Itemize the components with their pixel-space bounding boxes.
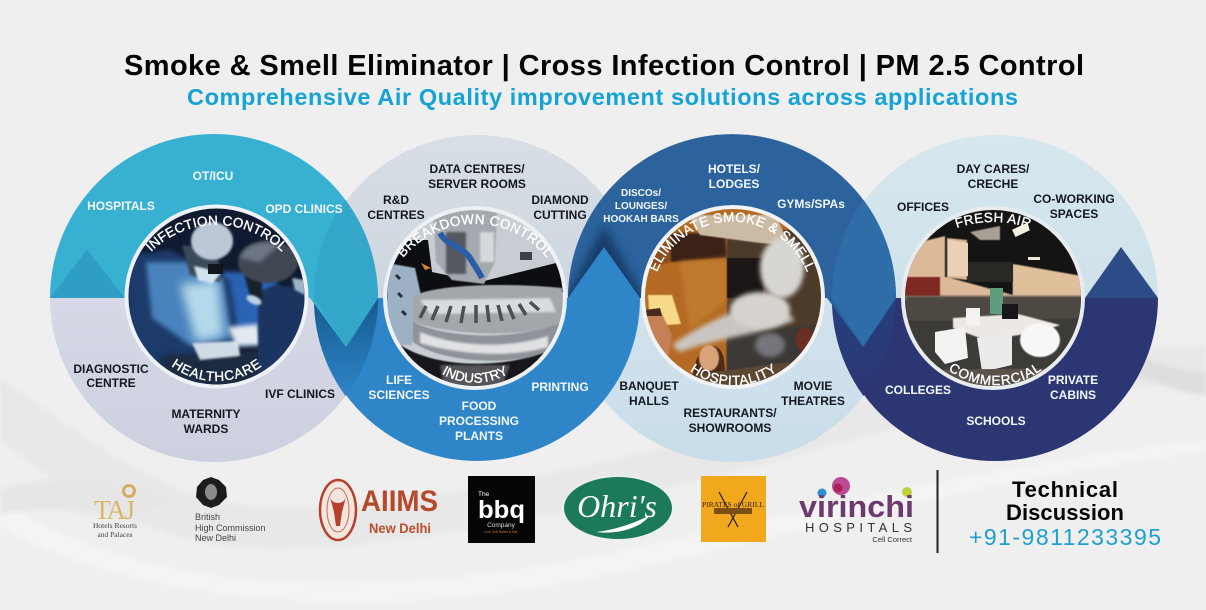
labels: industry applications: PROCESSING xyxy=(439,414,519,428)
curved label: healthcare: HEALTHCARE xyxy=(172,358,262,382)
labels: healthcare applications: IVF CLINICS xyxy=(265,387,335,401)
labels: industry applications: CENTRES xyxy=(367,208,425,222)
photo: industry xyxy=(383,206,567,390)
logo: Taj xyxy=(93,486,137,539)
labels: industry applications: FOOD xyxy=(462,399,497,413)
labels: industry applications: R&D xyxy=(383,193,409,207)
logo: British High Commission: High Commission xyxy=(195,523,266,533)
curved label: commercial: COMMERCIAL xyxy=(950,364,1042,386)
circle 3 upper band xyxy=(568,134,896,347)
subtitle: Comprehensive Air Quality improvement solutions across applications xyxy=(187,84,1018,110)
labels: commercial applications: SPACES xyxy=(1050,207,1098,221)
circle 2 upper half xyxy=(314,135,640,298)
photo: commercial xyxy=(901,206,1085,390)
contact block: Technical xyxy=(1012,477,1118,502)
curved label: eliminate smoke and smell: ELIMINATE SMOKE & SMELL xyxy=(648,212,814,272)
labels: commercial applications: OFFICES xyxy=(897,200,949,214)
contact block xyxy=(969,477,1161,550)
labels: industry applications: PRINTING xyxy=(531,380,589,394)
labels: healthcare applications: WARDS xyxy=(184,422,228,436)
labels: industry applications: CUTTING xyxy=(533,208,587,222)
logo: Pirates of Grill xyxy=(701,476,766,542)
logo: British High Commission: New Delhi xyxy=(195,533,236,543)
logo: Virinchi Hospitals: Cell Correct xyxy=(872,535,913,544)
title: Smoke & Smell Eliminator | Cross Infection Control | PM 2.5 Control xyxy=(124,50,1084,82)
photo: healthcare xyxy=(124,204,308,388)
circle 1 small triangle xyxy=(50,250,125,298)
circle 3 shadow beside peak xyxy=(568,225,642,298)
labels: commercial applications: CABINS xyxy=(1050,388,1096,402)
labels: commercial applications: DAY CARES/ xyxy=(957,162,1030,176)
circle 2 lower band xyxy=(314,247,640,461)
labels: industry applications: LIFE xyxy=(386,373,412,387)
logo: The bbq Company xyxy=(468,476,535,543)
labels: hospitality applications: SHOWROOMS xyxy=(689,421,771,435)
labels: hospitality applications: LOUNGES/ xyxy=(615,201,667,212)
labels: commercial applications: COLLEGES xyxy=(885,383,951,397)
logo: Ohri's xyxy=(563,476,673,540)
labels: hospitality applications: GYMs/SPAs xyxy=(777,197,845,211)
labels: commercial applications: SCHOOLS xyxy=(966,414,1026,428)
contact block: Discussion xyxy=(1006,500,1124,525)
circle 1 lower half xyxy=(50,298,378,462)
labels: commercial applications: PRIVATE xyxy=(1048,373,1098,387)
labels: healthcare applications: CENTRE xyxy=(86,376,136,390)
circle 4 peak xyxy=(1085,247,1158,298)
contact block: +91-9811233395 xyxy=(969,524,1161,550)
circle 3 lower half xyxy=(568,298,896,462)
labels: healthcare applications: OT/ICU xyxy=(193,169,233,183)
labels: industry applications: DATA CENTRES/ xyxy=(429,162,525,176)
divider xyxy=(936,470,938,553)
labels: hospitality applications: HOTELS/ xyxy=(708,162,761,176)
circle 1 upper band xyxy=(50,134,378,347)
labels: healthcare applications: OPD CLINICS xyxy=(265,202,343,216)
logo: The bbq Company: Live Grill Buffet & Bar xyxy=(484,530,519,534)
logo: British High Commission: British xyxy=(195,512,220,522)
panel: four linked circles xyxy=(50,134,1158,462)
logo: AIIMS New Delhi xyxy=(320,480,438,540)
labels: hospitality applications: HOOKAH BARS xyxy=(603,214,679,225)
circle 2 lens xyxy=(314,298,378,396)
logo: Taj: Hotels Resorts xyxy=(93,521,137,530)
labels: hospitality applications: THEATRES xyxy=(781,394,845,408)
curved label: industry: INDUSTRY xyxy=(442,365,506,383)
labels: industry applications: DIAMOND xyxy=(531,193,589,207)
labels: commercial applications: CRECHE xyxy=(968,177,1018,191)
labels: hospitality applications xyxy=(603,162,845,435)
labels: hospitality applications: BANQUET xyxy=(619,379,679,393)
labels: commercial applications: CO-WORKING xyxy=(1033,192,1115,206)
circle 4 lower half xyxy=(832,298,1158,461)
labels: hospitality applications: MOVIE xyxy=(794,379,832,393)
labels: healthcare applications: MATERNITY xyxy=(171,407,241,421)
curved label: hospitality: HOSPITALITY xyxy=(690,363,774,385)
logo: Virinchi Hospitals: HOSPITALS xyxy=(805,520,912,535)
labels: industry applications: SCIENCES xyxy=(368,388,430,402)
labels: hospitality applications: RESTAURANTS/ xyxy=(683,406,777,420)
labels: industry applications: SERVER ROOMS xyxy=(428,177,526,191)
labels: industry applications: PLANTS xyxy=(455,429,503,443)
labels: hospitality applications: DISCOs/ xyxy=(621,188,661,199)
logo: Taj: and Palaces xyxy=(97,530,133,539)
logo: Virinchi Hospitals xyxy=(799,477,914,544)
logo: The bbq Company: Company xyxy=(487,522,516,529)
logo: AIIMS New Delhi: New Delhi xyxy=(369,520,431,536)
circle 4 lens xyxy=(832,298,896,396)
logo: British High Commission xyxy=(195,477,266,543)
logo: The bbq Company: bbq xyxy=(478,496,525,524)
logo: Ohri's: Ohri's xyxy=(577,488,657,524)
curved label: fresh air: FRESH AIR xyxy=(954,212,1031,228)
photo: hospitality xyxy=(641,205,825,389)
circle 4 upper half xyxy=(832,135,1158,298)
labels: healthcare applications: DIAGNOSTIC xyxy=(73,362,149,376)
curved label: infection control: INFECTION CONTROL xyxy=(146,216,285,252)
logo: AIIMS New Delhi: AIIMS xyxy=(361,485,438,518)
logo: Pirates of Grill: PIRATES of GRILL xyxy=(702,500,764,509)
logo: Taj: TAJ xyxy=(94,495,135,525)
logo: Virinchi Hospitals: virinchi xyxy=(799,489,914,524)
labels: commercial applications xyxy=(885,162,1115,428)
labels: hospitality applications: HALLS xyxy=(629,394,669,408)
curved label: breakdown control: BREAKDOWN CONTROL xyxy=(396,214,550,258)
labels: hospitality applications: LODGES xyxy=(709,177,759,191)
labels: healthcare applications: HOSPITALS xyxy=(87,199,155,213)
labels: industry applications xyxy=(367,162,589,443)
circle 3 lens xyxy=(832,200,896,347)
logo: The bbq Company: The xyxy=(478,491,490,498)
labels: healthcare applications xyxy=(73,169,343,436)
circle 1 lens xyxy=(314,200,378,347)
